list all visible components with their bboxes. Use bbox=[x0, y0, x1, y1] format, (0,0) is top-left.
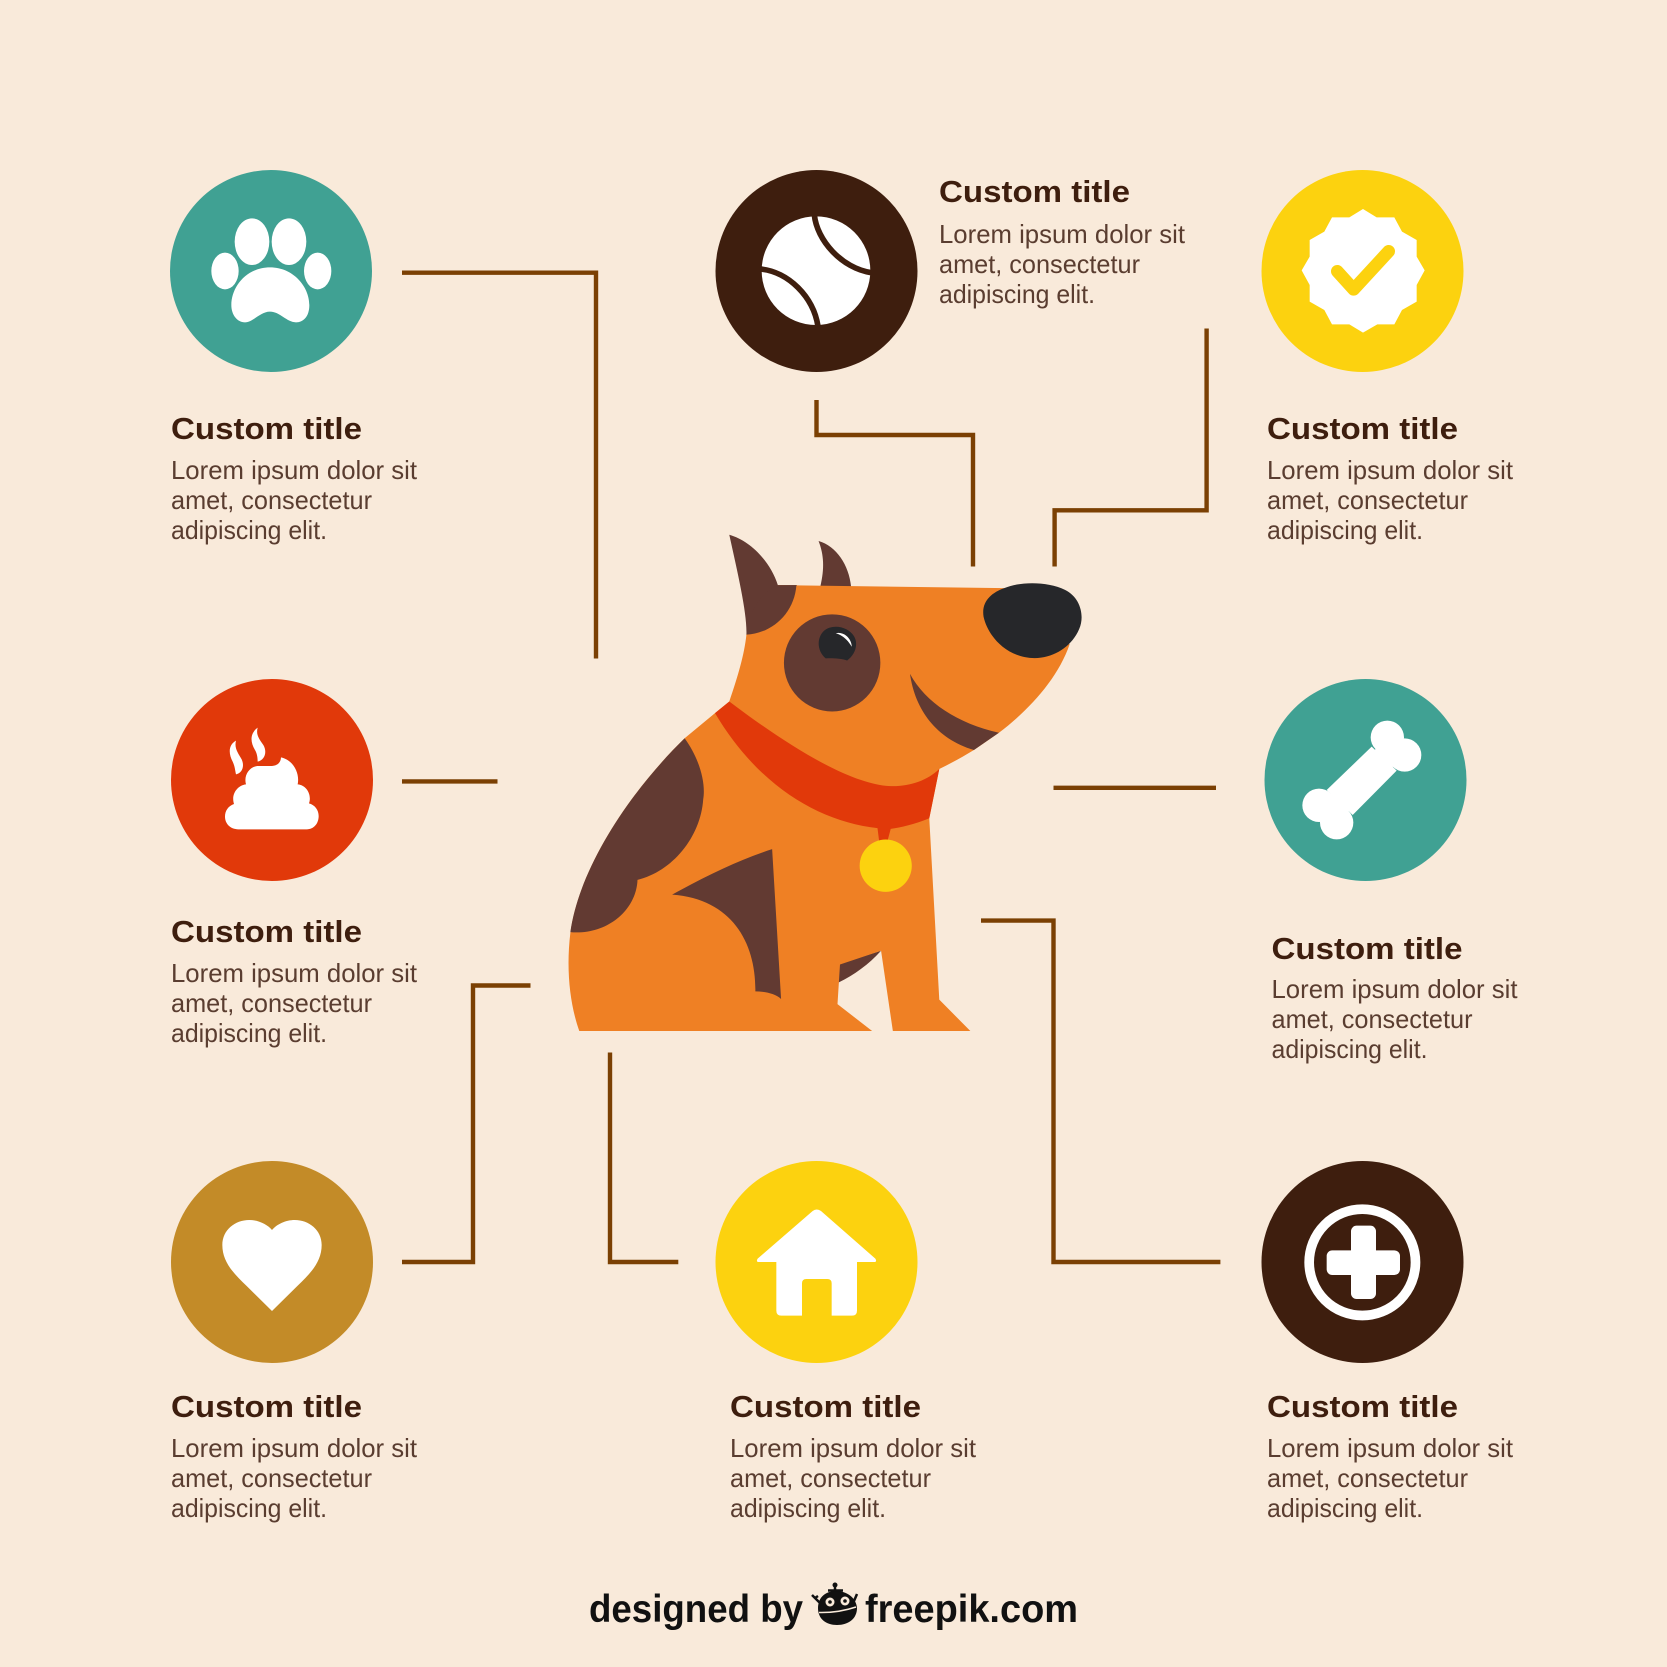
medical text: Lorem ipsum dolor sit bbox=[1267, 1433, 1514, 1463]
medical circle bbox=[1262, 1161, 1464, 1363]
ball text: adipiscing elit. bbox=[939, 279, 1095, 309]
item: heart bbox=[171, 1161, 418, 1523]
ball text: Lorem ipsum dolor sit bbox=[939, 219, 1186, 249]
paw text: amet, consectetur bbox=[171, 485, 372, 515]
icon: house bbox=[757, 1209, 876, 1316]
heart text: amet, consectetur bbox=[171, 1463, 372, 1493]
house text: Lorem ipsum dolor sit bbox=[730, 1433, 977, 1463]
icon: medical cross bbox=[1309, 1209, 1415, 1315]
poop text: amet, consectetur bbox=[171, 988, 372, 1018]
connector: house to dog bbox=[610, 1052, 678, 1262]
item: poop bbox=[171, 679, 418, 1048]
badge text: Custom title bbox=[1267, 411, 1458, 446]
icon: tennis ball bbox=[760, 215, 871, 326]
item: paw bbox=[170, 170, 418, 545]
poop circle bbox=[171, 679, 373, 881]
dog haunch patch bbox=[672, 849, 781, 999]
medical text: adipiscing elit. bbox=[1267, 1493, 1423, 1523]
item: house bbox=[716, 1161, 977, 1523]
paw text bbox=[171, 411, 418, 545]
paw text: Custom title bbox=[171, 411, 362, 446]
item: bone bbox=[1264, 679, 1518, 1064]
dog back patch bbox=[570, 738, 704, 932]
connector: ball to dog bbox=[816, 400, 973, 566]
connector: bone to dog bbox=[1054, 786, 1216, 790]
medical text: Custom title bbox=[1267, 1389, 1458, 1424]
medical text: amet, consectetur bbox=[1267, 1463, 1468, 1493]
poop text bbox=[171, 914, 418, 1048]
dog nose bbox=[983, 583, 1082, 658]
connector: heart to dog bbox=[402, 986, 530, 1262]
dog illustration bbox=[569, 535, 1082, 1031]
house text: Custom title bbox=[730, 1389, 921, 1424]
item: ball bbox=[716, 170, 1186, 372]
connector: poop to dog bbox=[402, 779, 498, 784]
poop text: Lorem ipsum dolor sit bbox=[171, 958, 418, 988]
bone text: Lorem ipsum dolor sit bbox=[1272, 974, 1518, 1004]
icon: poop bbox=[225, 728, 319, 829]
heart text: adipiscing elit. bbox=[171, 1493, 327, 1523]
icon: heart bbox=[222, 1220, 322, 1311]
dog collar bbox=[715, 701, 939, 842]
dog body and head bbox=[569, 585, 1070, 1031]
house circle bbox=[716, 1161, 918, 1363]
house text: amet, consectetur bbox=[730, 1463, 931, 1493]
dog mouth bbox=[910, 674, 999, 750]
dog pupil bbox=[819, 627, 856, 660]
bone text bbox=[1272, 931, 1518, 1064]
heart text: Custom title bbox=[171, 1389, 362, 1424]
dog right ear bbox=[819, 541, 851, 586]
connector: badge to dog bbox=[1055, 328, 1207, 566]
ball circle bbox=[716, 170, 918, 372]
ball text bbox=[939, 174, 1186, 309]
eye highlight bbox=[836, 633, 852, 647]
connector: paw to dog bbox=[402, 273, 596, 658]
heart circle bbox=[171, 1161, 373, 1363]
badge text bbox=[1267, 411, 1514, 545]
poop text: Custom title bbox=[171, 914, 362, 949]
badge text: Lorem ipsum dolor sit bbox=[1267, 455, 1514, 485]
house text: adipiscing elit. bbox=[730, 1493, 886, 1523]
house text bbox=[730, 1389, 977, 1523]
paw circle bbox=[170, 170, 372, 372]
item: badge bbox=[1262, 170, 1514, 545]
badge circle bbox=[1262, 170, 1464, 372]
connector: medical to dog bbox=[981, 921, 1220, 1262]
dog left ear bbox=[729, 535, 797, 637]
icon: freepik robot bbox=[812, 1582, 857, 1625]
poop text: adipiscing elit. bbox=[171, 1018, 327, 1048]
dog medal bbox=[860, 840, 912, 892]
footer text: freepik.com: freepik.com bbox=[865, 1588, 1078, 1631]
bone text: amet, consectetur bbox=[1272, 1004, 1473, 1034]
bone text: Custom title bbox=[1272, 931, 1462, 966]
badge text: amet, consectetur bbox=[1267, 485, 1468, 515]
dog belly shadow bbox=[836, 951, 881, 982]
medical text bbox=[1267, 1389, 1514, 1523]
icon: paw print bbox=[211, 218, 331, 322]
item: medical bbox=[1262, 1161, 1514, 1523]
paw text: Lorem ipsum dolor sit bbox=[171, 455, 418, 485]
bone text: adipiscing elit. bbox=[1272, 1034, 1428, 1064]
dog ear inner patch bbox=[746, 585, 796, 635]
footer text: designed by: designed by bbox=[589, 1588, 803, 1631]
heart text: Lorem ipsum dolor sit bbox=[171, 1433, 418, 1463]
ball text: amet, consectetur bbox=[939, 249, 1140, 279]
footer credit bbox=[589, 1582, 1078, 1631]
bone circle bbox=[1264, 679, 1466, 881]
dog eye patch bbox=[784, 614, 880, 711]
icon: bone bbox=[1302, 721, 1421, 839]
paw text: adipiscing elit. bbox=[171, 515, 327, 545]
badge text: adipiscing elit. bbox=[1267, 515, 1423, 545]
heart text bbox=[171, 1389, 418, 1523]
ball text: Custom title bbox=[939, 174, 1130, 209]
icon: check badge bbox=[1302, 209, 1425, 333]
